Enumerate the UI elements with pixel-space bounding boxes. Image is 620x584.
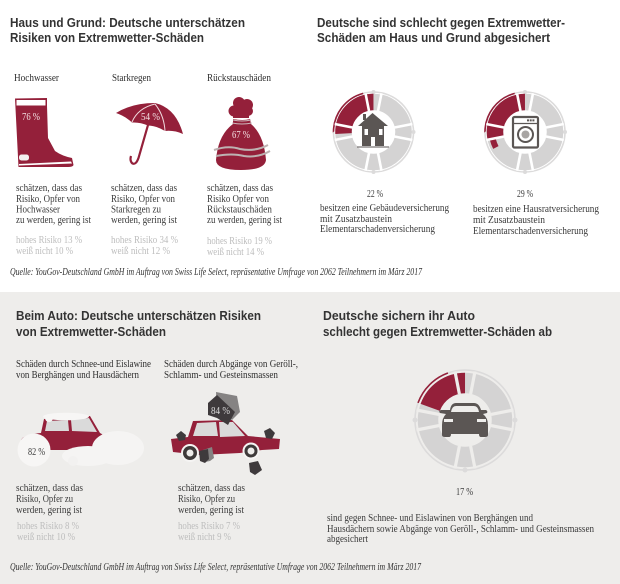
source note: upper: Quelle: YouGov-Deutschland GmbH im Auftrag von Swiss Life Select, repräsentative Umfrage von 2062 Teilnehmern im März 2017 — [10, 267, 423, 278]
column: snow avalanche: Risiko, Opfer zu — [16, 494, 73, 505]
icon: car under snow — [18, 413, 144, 466]
column: Starkregen — [111, 73, 183, 257]
column: snow avalanche: werden, gering ist — [16, 505, 82, 516]
column: Hochwasser: Hochwasser — [14, 73, 60, 84]
icon: car hit by rocks: 84 % — [211, 406, 230, 417]
icon: umbrella: 54 % — [141, 112, 160, 123]
text: contents insurance — [473, 189, 599, 237]
column: rock fall — [164, 359, 298, 543]
text: building insurance — [320, 189, 449, 235]
column: Rückstauschäden: schätzen, dass das — [207, 183, 273, 194]
column: Starkregen: schätzen, dass das — [111, 183, 177, 194]
column: Rückstauschäden: Rückstauschäden — [207, 73, 271, 84]
text: car insurance: abgesichert — [327, 534, 368, 545]
column: snow avalanche: schätzen, dass das — [16, 483, 83, 494]
heading: Auto risks: Beim Auto: Deutsche unterschätzen Risiken — [16, 309, 261, 323]
column: rock fall: Risiko, Opfer zu — [178, 494, 235, 505]
icon: car front — [439, 403, 488, 437]
text: car insurance — [327, 487, 594, 545]
column: Starkregen: werden, gering ist — [111, 215, 177, 226]
text: building insurance: besitzen eine Gebäudeversicherung — [320, 203, 449, 214]
column: Rückstauschäden: Rückstauschäden — [207, 204, 272, 216]
icon: car hit by rocks — [171, 392, 280, 475]
text: building insurance: mit Zusatzbaustein — [320, 214, 392, 225]
column: rock fall: Schäden durch Abgänge von Geröll-, — [164, 359, 298, 370]
text: contents insurance: 29 % — [517, 189, 533, 200]
heading: Auto insurance: schlecht gegen Extremwetter-Schäden ab — [323, 325, 552, 339]
text: building insurance: 22 % — [367, 189, 383, 200]
icon: sandbag — [214, 97, 270, 170]
column: snow avalanche: hohes Risiko 8 % — [17, 521, 79, 532]
chart: car insurance ring 17 % — [401, 356, 529, 484]
column: rock fall: Schlamm- und Gesteinsmassen — [164, 370, 278, 381]
column: Hochwasser: weiß nicht 10 % — [16, 246, 73, 257]
column: Starkregen: Starkregen — [112, 73, 151, 84]
heading: Haus und Grund insurance — [317, 16, 565, 45]
column: snow avalanche: weiß nicht 10 % — [17, 532, 75, 543]
heading: Haus und Grund risks — [10, 16, 245, 45]
column: Rückstauschäden: zu werden, gering ist — [207, 215, 282, 226]
text: contents insurance: besitzen eine Hausratversicherung — [473, 204, 599, 215]
icon: house — [357, 113, 389, 148]
text: car insurance: Hausdächern sowie Abgänge von Geröll-, Schlamm- und Gesteinsmassen — [327, 524, 594, 535]
column: Rückstauschäden: Risiko Opfer von — [207, 194, 269, 205]
column: Hochwasser: Hochwasser — [16, 204, 61, 216]
column: Starkregen: hohes Risiko 34 % — [111, 235, 178, 246]
heading: Auto risks — [16, 309, 261, 339]
column: Hochwasser: zu werden, gering ist — [16, 215, 91, 226]
icon: sandbag: 67 % — [232, 130, 250, 141]
chart: building insurance ring 22 % — [334, 90, 416, 174]
heading: Auto insurance — [323, 309, 552, 339]
column: rock fall: hohes Risiko 7 % — [178, 521, 240, 532]
column: Hochwasser: schätzen, dass das — [16, 183, 82, 194]
column: snow avalanche: Schäden durch Schnee-und Eislawine — [16, 359, 151, 370]
column: Rückstauschäden — [207, 73, 282, 258]
column: Hochwasser: Risiko, Opfer von — [16, 194, 80, 205]
column: rock fall: schätzen, dass das — [178, 483, 245, 494]
text: car insurance: 17 % — [456, 487, 473, 498]
column: Hochwasser — [14, 73, 91, 257]
column: Starkregen: weiß nicht 12 % — [111, 246, 170, 257]
column: Starkregen: Starkregen zu — [111, 204, 161, 216]
heading: Haus und Grund insurance: Deutsche sind schlecht gegen Extremwetter- — [317, 16, 565, 30]
heading: Auto insurance: Deutsche sichern ihr Auto — [323, 309, 475, 323]
icon: umbrella — [116, 103, 183, 164]
column: rock fall: werden, gering ist — [178, 505, 244, 516]
icon: washing machine — [513, 117, 538, 148]
text: car insurance: sind gegen Schnee- und Eislawinen von Berghängen und — [327, 513, 533, 524]
column: snow avalanche — [16, 359, 151, 543]
heading: Haus und Grund insurance: Schäden am Haus und Grund abgesichert — [317, 31, 551, 45]
heading: Auto risks: von Extremwetter-Schäden — [16, 325, 166, 339]
column: Rückstauschäden: hohes Risiko 19 % — [207, 236, 272, 247]
column: Hochwasser: hohes Risiko 13 % — [16, 235, 82, 246]
text: contents insurance: mit Zusatzbaustein — [473, 215, 545, 226]
source note: lower: Quelle: YouGov-Deutschland GmbH im Auftrag von Swiss Life Select, repräsentative Umfrage von 2062 Teilnehmern im März 2017 — [10, 562, 422, 573]
text: building insurance: Elementarschadenversicherung — [320, 224, 435, 235]
text: contents insurance: Elementarschadenversicherung — [473, 226, 588, 237]
heading: Haus und Grund risks: Risiken von Extremwetter-Schäden — [10, 31, 204, 45]
column: Rückstauschäden: weiß nicht 14 % — [207, 247, 264, 258]
chart: contents insurance ring 29 % — [480, 87, 570, 177]
column: snow avalanche: von Berghängen und Hausdächern — [16, 370, 139, 381]
heading: Haus und Grund risks: Haus und Grund: Deutsche unterschätzen — [10, 16, 245, 30]
icon: rubber boot: 76 % — [22, 112, 40, 123]
icon: rubber boot — [15, 98, 74, 167]
icon: car under snow: 82 % — [28, 447, 45, 458]
panel: lower background — [0, 292, 620, 584]
column: rock fall: weiß nicht 9 % — [178, 532, 231, 543]
column: Starkregen: Risiko, Opfer von — [111, 194, 175, 205]
